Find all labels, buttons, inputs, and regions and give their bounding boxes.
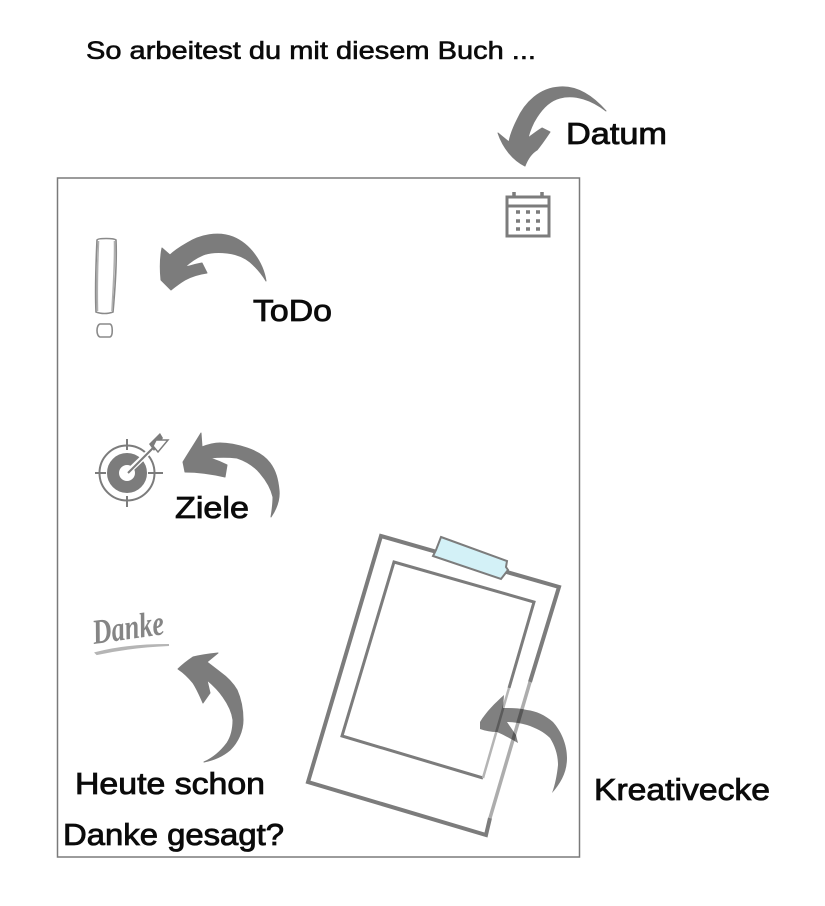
arrow: ToDo xyxy=(160,234,266,290)
label: ToDo: ToDo xyxy=(253,293,332,328)
arrow: Kreativecke xyxy=(480,695,567,793)
title: So arbeitest du mit diesem Buch ... xyxy=(86,37,536,65)
icon: Danke lettering: Danke xyxy=(89,603,166,652)
label: Datum: Datum xyxy=(566,116,667,151)
label: Kreativecke: Kreativecke xyxy=(594,772,770,807)
icon: target with dart xyxy=(95,433,168,507)
arrow: Danke xyxy=(178,653,243,762)
panel: book page xyxy=(58,178,580,857)
arrow: Ziele xyxy=(183,433,279,517)
label: Danke gesagt?: Danke gesagt? xyxy=(63,817,284,852)
washi tape xyxy=(433,537,508,579)
label: Heute schon: Heute schon xyxy=(75,766,265,801)
arrow: Datum xyxy=(498,87,606,166)
polaroid frame xyxy=(308,536,559,835)
label: Ziele: Ziele xyxy=(175,490,249,525)
icon: calendar xyxy=(507,192,549,236)
icon: exclamation mark xyxy=(96,238,116,337)
